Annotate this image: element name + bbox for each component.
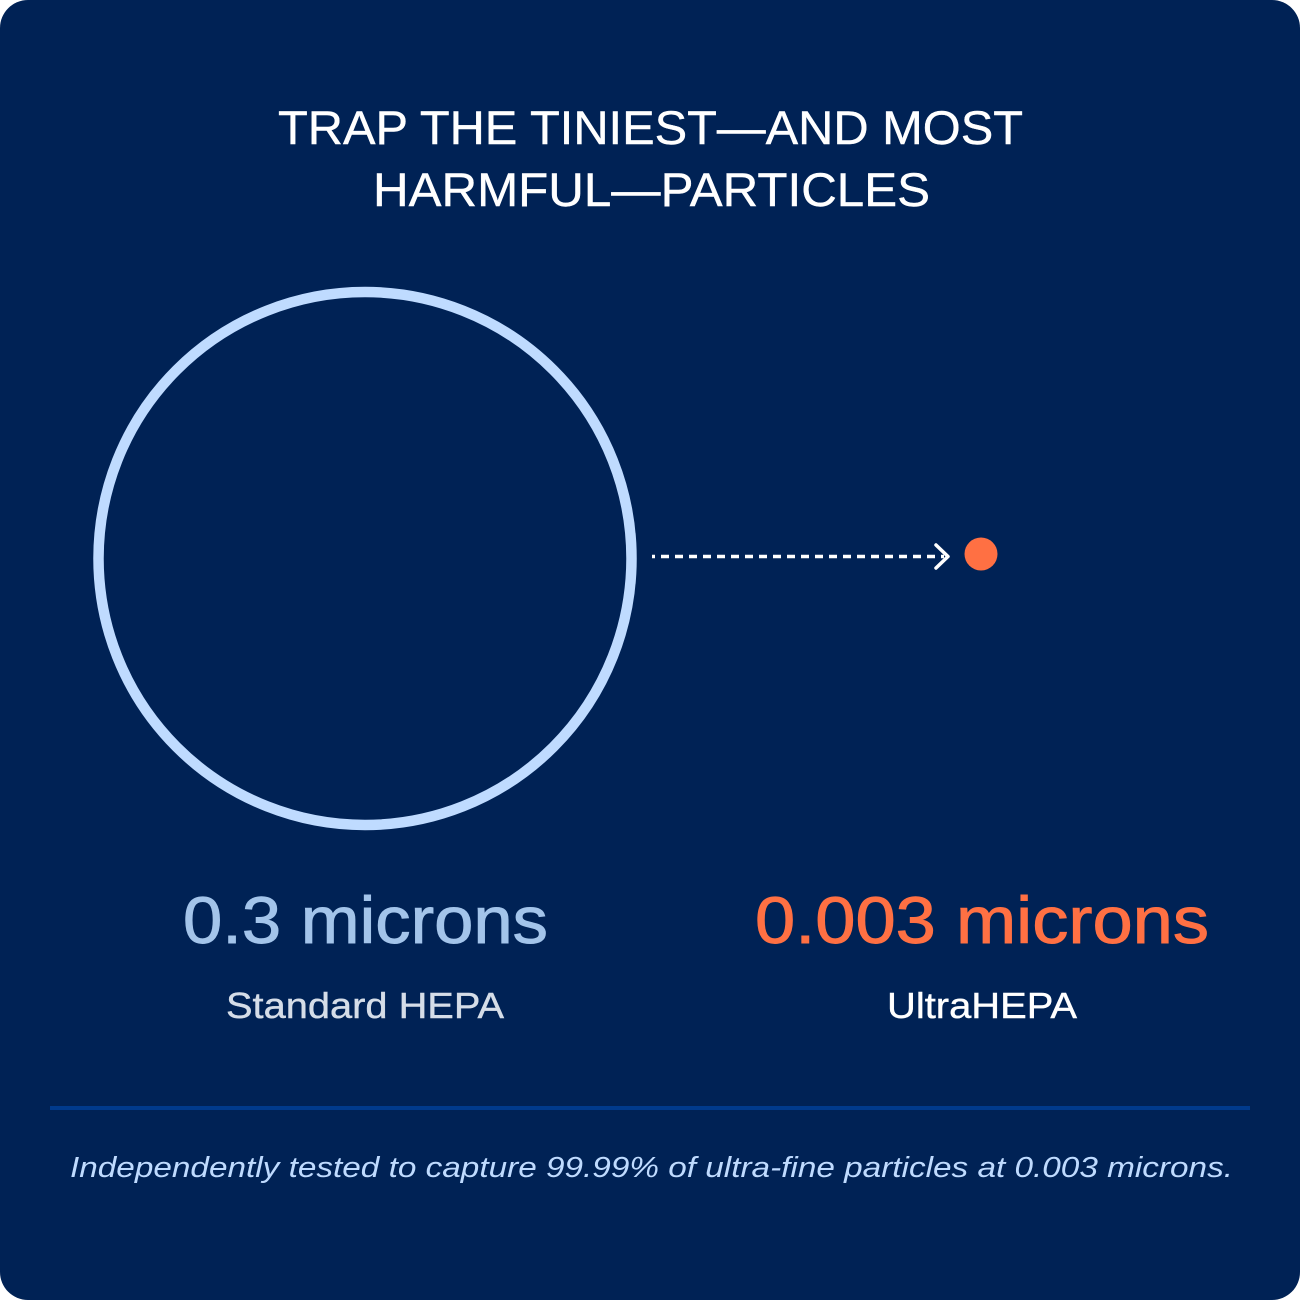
arrow: [652, 545, 948, 568]
label: UltraHEPA: UltraHEPA: [887, 985, 1077, 1026]
title: HARMFUL—PARTICLES: [373, 163, 930, 216]
title: TRAP THE TINIEST—AND MOST: [278, 101, 1023, 154]
large circle: 0.3 microns: [98, 292, 632, 825]
label: 0.003 microns: 0.003 microns: [755, 883, 1209, 957]
label: 0.3 microns: 0.3 microns: [183, 883, 548, 957]
label: Standard HEPA: Standard HEPA: [226, 985, 504, 1026]
divider: [50, 1106, 1250, 1110]
footnote: Independently tested to capture 99.99% of ultra-fine particles at 0.003 microns.: [70, 1152, 1233, 1184]
small dot: 0.003 microns: [964, 538, 998, 570]
title: [278, 101, 1023, 216]
